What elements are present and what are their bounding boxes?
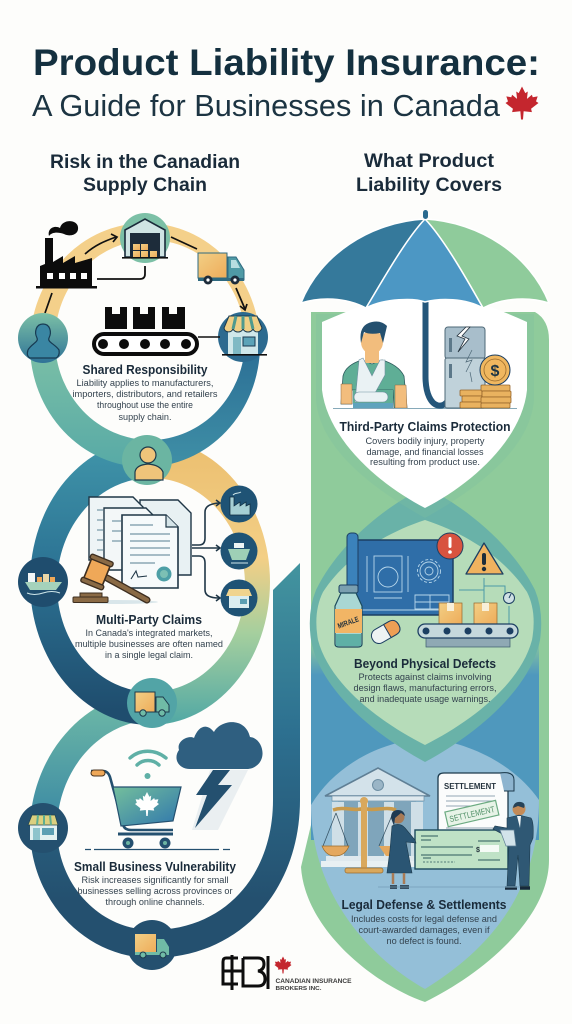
heading: risk column: Risk in the Canadian bbox=[50, 152, 240, 173]
text: small business vulnerability: businesses selling across provinces or bbox=[78, 886, 233, 897]
icon: delivery truck bbox=[198, 253, 244, 284]
text: shared responsibility: importers, distributors, and retailers bbox=[72, 389, 218, 400]
shield backdrop bbox=[301, 312, 549, 1002]
icon: blueprint bbox=[347, 533, 453, 615]
icon: storm cloud bbox=[176, 722, 263, 769]
heading: coverage column: What Product bbox=[364, 151, 495, 172]
text: multi-party claims: In Canada's integrated markets, bbox=[86, 628, 212, 639]
icon: storm beam bbox=[192, 770, 248, 830]
circuit lines bbox=[459, 578, 509, 624]
icon: umbrella canopy bbox=[301, 210, 549, 308]
text: third-party claims: Covers bodily injury, property bbox=[366, 436, 485, 447]
icon: coins bbox=[460, 355, 511, 408]
panel: shared responsibility bbox=[18, 213, 268, 423]
text: shared responsibility: Liability applies to manufacturers, bbox=[76, 378, 214, 389]
text: beyond physical defects: Protects against claims involving bbox=[358, 672, 492, 683]
title: Product Liability Insurance: bbox=[33, 42, 540, 83]
icon: red alert bbox=[437, 533, 463, 559]
heading: coverage column bbox=[356, 151, 502, 196]
icon: store node bbox=[220, 580, 258, 616]
panel: small business vulnerability bbox=[18, 722, 263, 970]
icon: wifi bbox=[130, 751, 166, 779]
text: legal defense bbox=[342, 897, 506, 947]
text: small business vulnerability: through online channels. bbox=[106, 897, 204, 908]
text: beyond physical defects bbox=[354, 656, 496, 705]
text: beyond physical defects: design flaws, manufacturing errors, bbox=[354, 683, 496, 694]
icon: truck node bbox=[127, 678, 177, 728]
text: third-party claims: damage, and financial losses bbox=[366, 447, 484, 458]
heading: coverage column: Liability Covers bbox=[356, 175, 502, 196]
icon: broken pill bbox=[369, 618, 402, 646]
icon: lightning bolt bbox=[195, 770, 232, 828]
title bbox=[32, 42, 540, 123]
icon: settlement cheque: $ bbox=[476, 847, 480, 854]
icon: store node, left bbox=[18, 803, 68, 853]
title: A Guide for Businesses in Canada bbox=[32, 88, 501, 123]
icon: gavel bbox=[72, 554, 158, 604]
icon: conveyor with parcels bbox=[418, 603, 518, 647]
text: multi-party claims bbox=[75, 612, 223, 661]
heading: risk column: Supply Chain bbox=[83, 175, 207, 196]
text: third-party claims bbox=[340, 419, 511, 468]
icon: coins: $ bbox=[491, 363, 500, 380]
icon: settlement cheque bbox=[415, 830, 508, 869]
text: third-party claims: Third-Party Claims Protection bbox=[340, 419, 511, 434]
icon: bottle: MIRALE bbox=[336, 614, 360, 630]
arrows: documents to parties bbox=[192, 500, 220, 601]
icon: settlement document: SETTLEMENT bbox=[444, 781, 497, 791]
text: legal defense: Includes costs for legal defense and bbox=[351, 914, 497, 925]
icon: settlement document bbox=[438, 773, 514, 838]
text: shared responsibility: Shared Responsibility bbox=[82, 362, 208, 377]
text: shared responsibility: throughout use the entire bbox=[97, 400, 193, 411]
shield blue band bbox=[311, 600, 539, 840]
icon: courthouse bbox=[321, 768, 435, 867]
icon: woman figure bbox=[387, 810, 416, 887]
icon: person node, centre bbox=[122, 435, 172, 485]
arrow: factory to warehouse bbox=[85, 234, 117, 254]
text: legal defense: Legal Defense & Settlements bbox=[342, 897, 506, 912]
text: shared responsibility: supply chain. bbox=[118, 412, 172, 423]
icon: man figure bbox=[493, 802, 533, 888]
logo text: CANADIAN INSURANCE bbox=[276, 979, 352, 985]
text: multi-party claims: in a single legal claim. bbox=[105, 650, 193, 661]
ribbon loop 1 bbox=[30, 223, 260, 467]
text: small business vulnerability bbox=[74, 859, 237, 908]
icon: factory node bbox=[220, 486, 258, 522]
icon: injured person bbox=[341, 322, 407, 408]
icon: warning triangle bbox=[466, 543, 503, 574]
text: multi-party claims: multiple businesses are often named bbox=[75, 639, 223, 650]
ground line bbox=[378, 886, 520, 888]
text: legal defense: no defect is found. bbox=[386, 936, 462, 947]
icon: conveyor with boxes bbox=[94, 307, 197, 354]
panel: coverage shield stack bbox=[301, 210, 549, 1002]
logo text bbox=[276, 979, 352, 992]
panel: supply chain ribbon bbox=[30, 223, 300, 958]
icon: claim documents bbox=[89, 497, 191, 588]
panel: legal defense shield bbox=[311, 738, 539, 989]
text: small business vulnerability: Small Business Vulnerability bbox=[74, 859, 237, 874]
text: beyond physical defects: and inadequate usage warnings. bbox=[360, 694, 490, 705]
icon: bottle bbox=[335, 585, 362, 647]
panel: third-party claims shield bbox=[316, 295, 534, 518]
connector: conveyor to store bbox=[198, 336, 220, 338]
icon: settlement document: SETTLEMENT bbox=[448, 804, 496, 824]
icon: ship node bbox=[220, 532, 258, 570]
icon: gauge bbox=[504, 592, 514, 604]
text: legal defense: court-awarded damages, even if bbox=[358, 925, 490, 936]
icon: scales of justice bbox=[322, 797, 403, 873]
icon: warehouse bbox=[120, 213, 170, 263]
text: third-party claims: resulting from product use. bbox=[370, 457, 480, 468]
logo: canadian insurance brokers bbox=[223, 955, 352, 992]
logo text: BROKERS INC. bbox=[276, 986, 322, 992]
ribbon loop 3 bbox=[30, 563, 300, 958]
panel: beyond physical defects shield bbox=[310, 488, 541, 762]
arrow: truck to store bbox=[236, 288, 247, 310]
panel: multi-party claims bbox=[18, 435, 258, 728]
text: shared responsibility bbox=[72, 362, 218, 423]
heading: risk column bbox=[50, 152, 240, 196]
icon: shopping cart bbox=[85, 770, 230, 850]
connector: factory to warehouse bbox=[97, 266, 145, 279]
icon: damaged fridge bbox=[445, 327, 485, 408]
icon: ship node, left bbox=[18, 557, 68, 607]
text: multi-party claims: Multi-Party Claims bbox=[96, 612, 202, 627]
logo mark bbox=[223, 955, 268, 990]
connector: warehouse to truck bbox=[171, 237, 197, 249]
ribbon loop 2 bbox=[30, 439, 270, 725]
text: small business vulnerability: Risk increases significantly for small bbox=[82, 875, 228, 886]
icon: factory bbox=[36, 221, 97, 288]
ground line bbox=[333, 408, 517, 410]
logo maple leaf bbox=[274, 956, 292, 974]
icon: person node, left bbox=[18, 293, 68, 363]
icon: umbrella handle bbox=[425, 298, 451, 406]
text: beyond physical defects: Beyond Physical Defects bbox=[354, 656, 496, 671]
icon: storefront bbox=[218, 312, 268, 362]
icon: truck node, bottom bbox=[127, 920, 177, 970]
